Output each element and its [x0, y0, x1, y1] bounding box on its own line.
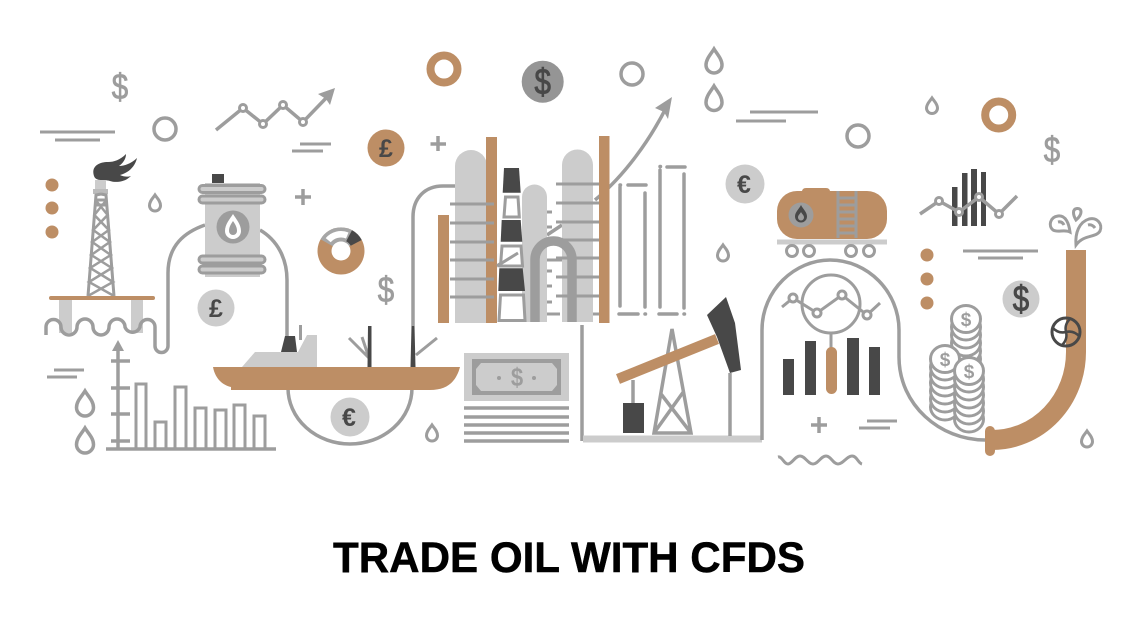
- oil rig: [51, 154, 153, 333]
- U pipe: [535, 241, 572, 322]
- brown dots left: [46, 178, 58, 238]
- rail tanker: [777, 188, 887, 256]
- small drop top right: [926, 98, 938, 114]
- arc under ship: [288, 388, 412, 444]
- pound coin brown: [368, 130, 404, 166]
- stack right: [954, 358, 984, 432]
- short lines lower left: [47, 370, 84, 377]
- small drop: [150, 195, 160, 211]
- brown ring right: [985, 102, 1012, 128]
- plus: [295, 189, 311, 205]
- banknote stack: [464, 353, 569, 441]
- ring outline right: [847, 125, 869, 147]
- short lines lower right: [859, 421, 897, 428]
- plus near refinery: [430, 136, 446, 151]
- pumpjack: [582, 297, 762, 441]
- ring outline top centre: [621, 63, 643, 85]
- brown dots right: [920, 248, 934, 310]
- refinery: [438, 136, 610, 323]
- decorative lines top left: [40, 132, 115, 140]
- tanker ship: [213, 325, 460, 390]
- dollar sign top left: $: [112, 66, 128, 107]
- drops lower left: [76, 391, 94, 453]
- small drop bottom centre: [426, 425, 438, 441]
- coin dollar labels: $: [964, 362, 975, 383]
- pipe into refinery: [413, 186, 493, 326]
- oil splash: [1050, 208, 1101, 245]
- pound coin brown: £: [379, 135, 393, 163]
- coin stacks: [930, 306, 984, 432]
- twin drops top: [706, 49, 722, 110]
- dollar coin right: $: [1013, 278, 1029, 319]
- bar chart lower left: [106, 340, 276, 449]
- magnifier with chart: [782, 275, 880, 395]
- banknote stack: $: [511, 363, 524, 392]
- euro coin right: [726, 164, 764, 204]
- pound coin light: £: [209, 295, 223, 323]
- plus lower right: [811, 417, 827, 433]
- dashed column outlines: [619, 166, 685, 314]
- stack left: [930, 346, 960, 420]
- pound coin light: [198, 290, 234, 326]
- dollar sign mid left: $: [378, 269, 394, 310]
- short lines: [292, 144, 331, 151]
- columns: [455, 149, 593, 323]
- dollar coin dark grey: $: [534, 61, 551, 102]
- long pipe from pump to coins: [762, 260, 985, 440]
- flare flame: [93, 154, 137, 182]
- lines top right of centre: [736, 112, 818, 121]
- donut chart: [318, 227, 364, 274]
- valve wheel: [1052, 318, 1080, 346]
- coin dollar labels: $: [940, 350, 951, 371]
- rising curve arrow: [497, 97, 672, 266]
- small drop bottom right: [1082, 431, 1092, 447]
- brown uprights: [438, 136, 610, 323]
- ring outline top left: [154, 118, 176, 140]
- combo chart right: [920, 169, 1017, 226]
- pipeline from rig to barrel: [46, 225, 205, 352]
- trend line with arrow: [216, 88, 335, 130]
- wavy line: [778, 456, 862, 464]
- euro coin under ship: [330, 398, 370, 436]
- lines right: [963, 251, 1038, 258]
- euro coin right: €: [737, 171, 751, 199]
- euro coin under ship: €: [342, 404, 356, 432]
- small drop centre: [718, 245, 728, 261]
- coin dollar labels: [940, 310, 975, 383]
- title: TRADE OIL WITH CFDS: [333, 534, 805, 582]
- oil barrel: [199, 174, 265, 277]
- brown ring top: [430, 56, 458, 82]
- brown pipe with outlet: [985, 250, 1076, 456]
- stack back: [952, 306, 980, 380]
- dollar sign right: $: [1044, 129, 1060, 170]
- dollar coin right: [1002, 278, 1040, 319]
- rungs: [450, 184, 599, 314]
- central tower: [503, 168, 521, 193]
- coin dollar labels: $: [961, 310, 972, 331]
- dollar coin dark grey: [522, 61, 564, 103]
- pipeline from barrel to ship: [260, 230, 287, 336]
